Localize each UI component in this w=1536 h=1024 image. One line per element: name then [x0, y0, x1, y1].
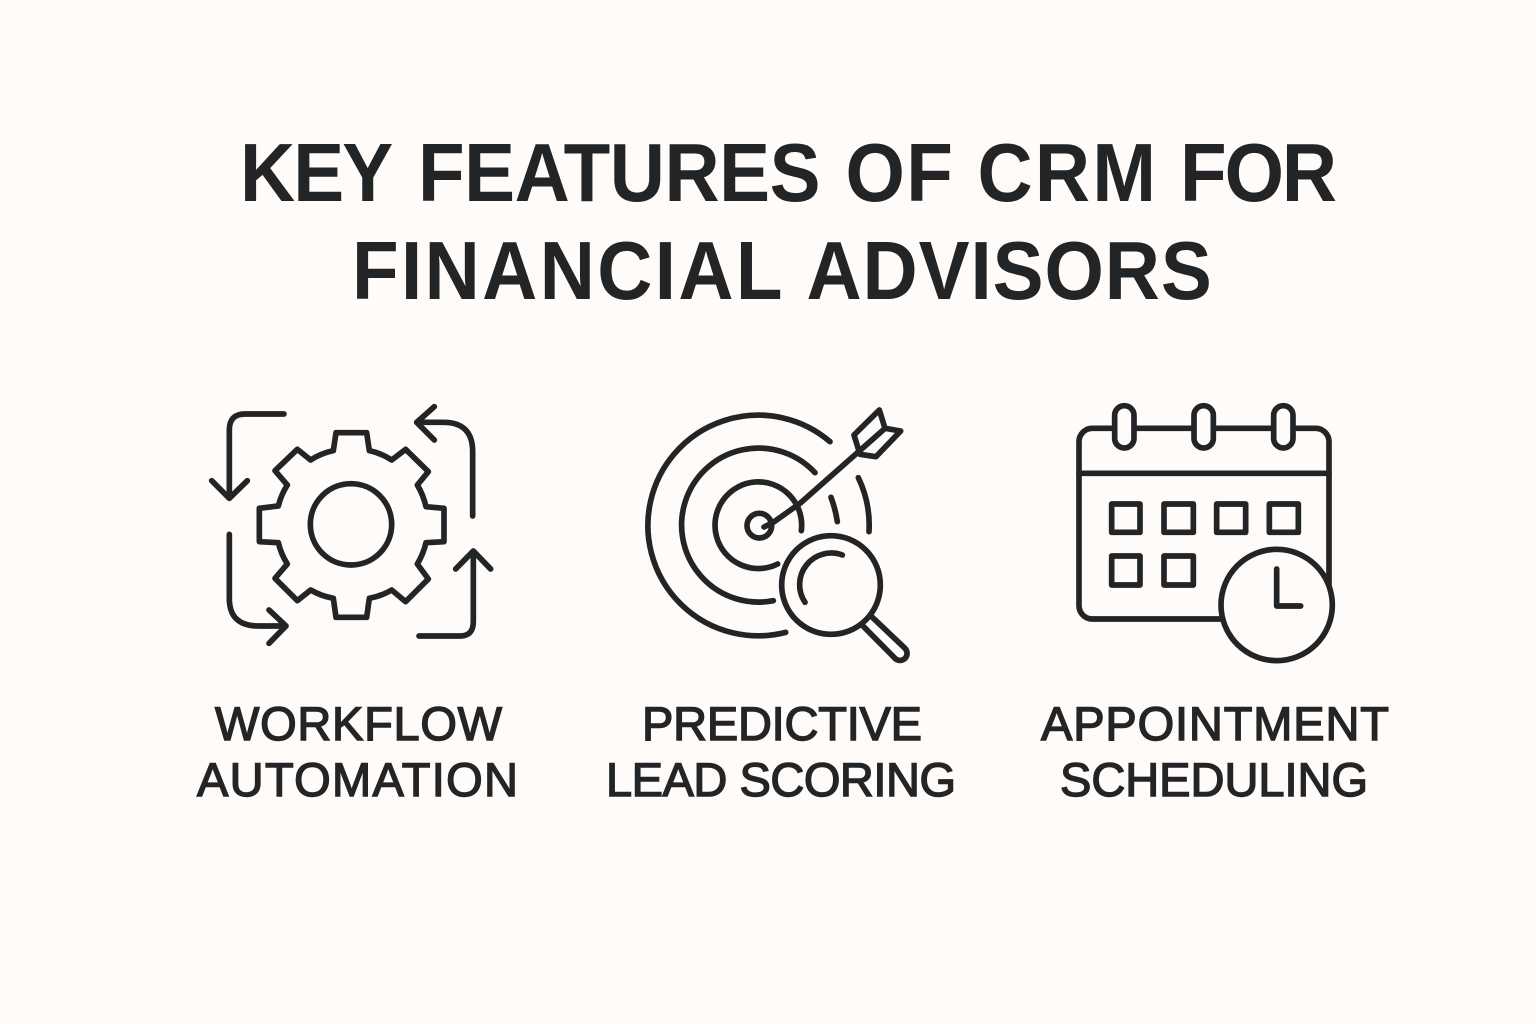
- magnifier handle: [863, 616, 907, 660]
- label: predictive lead scoring: [606, 697, 956, 806]
- title: KEY: [240, 126, 393, 219]
- label: appointment scheduling: APPOINTMENT: [1041, 697, 1389, 750]
- gear: [259, 433, 444, 617]
- label: predictive lead scoring: LEAD SCORING: [606, 753, 956, 806]
- arrow: top left: [212, 414, 284, 498]
- target rings: [648, 415, 830, 636]
- icon: workflow automation gear with cycle arrows: [212, 407, 491, 643]
- label: workflow automation: AUTOMATION: [197, 753, 518, 806]
- magnifier highlight: [800, 553, 842, 602]
- label: appointment scheduling: SCHEDULING: [1060, 753, 1368, 806]
- clock hands: [1277, 569, 1301, 606]
- title: [240, 126, 1337, 317]
- date squares: [1112, 504, 1298, 585]
- magnifier lens: [782, 536, 880, 634]
- title: CRM: [978, 126, 1156, 219]
- target right dashes: [831, 478, 869, 532]
- icon: appointment calendar with clock: [1079, 406, 1332, 661]
- arrow: bottom left: [229, 534, 286, 643]
- label: predictive lead scoring: PREDICTIVE: [642, 697, 922, 750]
- title: FINANCIAL: [352, 224, 783, 317]
- clock face: [1221, 549, 1332, 661]
- bullseye: [747, 513, 772, 538]
- arrow fletching: [854, 410, 901, 457]
- icon: predictive lead scoring target with magnifier: [648, 410, 907, 660]
- title: FEATURES: [418, 126, 821, 219]
- arrow shaft: [764, 453, 857, 527]
- binder rings: [1115, 406, 1293, 448]
- title: OF: [846, 126, 953, 219]
- label: workflow automation: WORKFLOW: [215, 697, 503, 750]
- arrow: bottom right: [419, 551, 491, 636]
- label: appointment scheduling: [1041, 697, 1389, 806]
- title: ADVISORS: [806, 224, 1212, 317]
- title: FOR: [1180, 126, 1337, 219]
- calendar body: [1079, 428, 1329, 619]
- label: workflow automation: [197, 697, 518, 806]
- arrow: top right: [417, 407, 473, 516]
- gear hub: [310, 484, 392, 565]
- calendar header line: [1079, 465, 1329, 482]
